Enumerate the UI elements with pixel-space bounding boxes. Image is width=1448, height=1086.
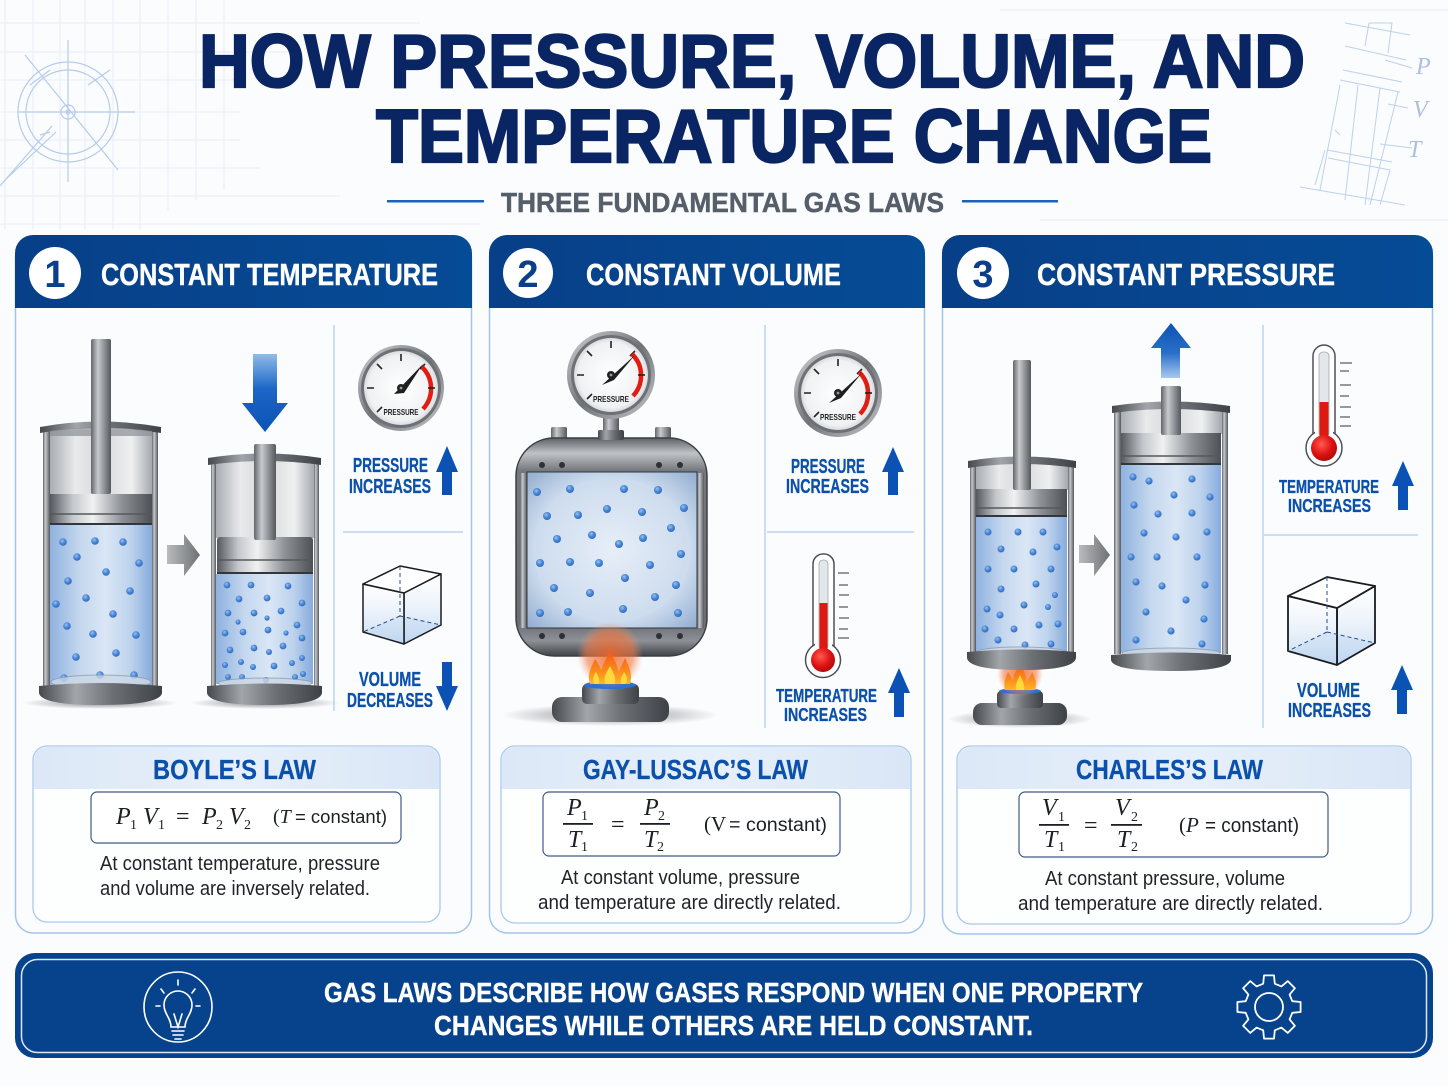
formula: Charles: = constant) — [1205, 815, 1299, 837]
panel 2 header: CONSTANT VOLUME — [586, 258, 841, 292]
flame — [577, 622, 643, 688]
arrow: compression — [242, 354, 288, 432]
gauge: pressure — [358, 345, 444, 431]
title — [199, 19, 1305, 178]
formula: Charles: 1 — [1058, 810, 1065, 825]
piston cylinder after heating — [1111, 386, 1231, 671]
piston cylinder before compression — [22, 339, 178, 709]
gauge: pressure: PRESSURE — [820, 412, 856, 422]
panel 2 header: 2 — [517, 254, 539, 296]
footer text: CHANGES WHILE OTHERS ARE HELD CONSTANT. — [434, 1010, 1033, 1041]
label: volume increases: INCREASES — [1288, 700, 1371, 722]
formula: Boyle — [91, 792, 401, 843]
label: volume decreases: VOLUME — [359, 669, 421, 691]
label: pressure increases — [786, 456, 869, 498]
flame — [997, 651, 1043, 697]
description: Gay-Lussac: and temperature are directly related. — [538, 892, 841, 914]
arrow: temperature up — [1392, 461, 1414, 510]
formula: Gay-Lussac: T — [644, 827, 659, 853]
law card: Boyle's law — [33, 746, 440, 922]
title: TEMPERATURE CHANGE — [376, 94, 1212, 178]
gauge: pressure: PRESSURE — [384, 407, 419, 417]
formula: Charles — [1019, 792, 1328, 857]
formula: Boyle: = constant) — [295, 806, 387, 827]
formula: Charles: T — [1117, 827, 1132, 853]
footer banner — [15, 953, 1433, 1058]
formula: Boyle: (T — [273, 806, 293, 828]
panel 1 header: 1 — [44, 254, 66, 296]
label: volume decreases: DECREASES — [347, 690, 433, 712]
formula: Charles: 1 — [1058, 840, 1065, 855]
formula: Gay-Lussac: 2 — [657, 840, 664, 855]
label: pressure increases: INCREASES — [349, 476, 431, 498]
law card: Boyle's law: BOYLE’S LAW — [153, 754, 316, 785]
background: blueprint circle drawing — [0, 40, 135, 186]
panel 3 header: 3 — [972, 254, 994, 296]
label: temperature increases — [1279, 476, 1379, 516]
label: temperature increases: INCREASES — [1288, 495, 1371, 516]
background: blueprint grid — [0, 0, 1448, 230]
footer text: GAS LAWS DESCRIBE HOW GASES RESPOND WHEN ONE PROPERTY — [324, 977, 1143, 1008]
arrow: process — [1079, 534, 1110, 576]
law card: Gay-Lussac's law — [501, 746, 911, 923]
arrow: expansion — [1151, 323, 1191, 378]
label: pressure increases: PRESSURE — [353, 455, 428, 477]
law card: Gay-Lussac's law: GAY-LUSSAC’S LAW — [583, 754, 808, 785]
description: Charles: and temperature are directly related. — [1018, 893, 1323, 915]
formula: Gay-Lussac: 1 — [581, 809, 588, 824]
icon: light bulb — [144, 972, 212, 1042]
formula: Boyle: 2 — [244, 818, 251, 833]
icon: thermometer — [806, 554, 849, 678]
background: blueprint piston drawing with P V T — [1300, 23, 1431, 205]
formula: Gay-Lussac: 1 — [581, 840, 588, 855]
formula: Gay-Lussac — [543, 792, 840, 856]
formula: Gay-Lussac: T — [568, 827, 583, 853]
icon: gear — [1237, 975, 1301, 1039]
formula: Charles: 2 — [1131, 810, 1138, 825]
background: blueprint piston drawing with P V T: V — [1413, 97, 1430, 123]
description: Boyle: At constant temperature, pressure — [100, 853, 380, 875]
label: pressure increases — [349, 455, 431, 498]
arrow: process — [167, 534, 200, 576]
arrow: volume down — [436, 662, 458, 711]
label: temperature increases: TEMPERATURE — [1279, 476, 1379, 497]
formula: Charles: V — [1115, 795, 1132, 821]
burner — [502, 681, 718, 726]
piston cylinder after compression — [190, 444, 340, 709]
formula: Boyle: P — [201, 804, 217, 830]
arrow: pressure up — [882, 447, 904, 495]
background: blueprint piston drawing with P V T: T — [1408, 137, 1423, 163]
formula: Charles: T — [1044, 827, 1059, 853]
label: temperature increases: INCREASES — [784, 704, 867, 725]
piston cylinder before heating — [967, 360, 1076, 670]
sealed tank — [516, 418, 707, 656]
label: pressure increases: INCREASES — [786, 476, 869, 498]
formula: Gay-Lussac: = constant) — [729, 815, 827, 836]
formula: Gay-Lussac: (V — [704, 812, 726, 836]
formula: Boyle: P — [115, 804, 131, 830]
label: volume decreases — [347, 669, 433, 712]
formula: Gay-Lussac: = — [611, 812, 625, 838]
background: blueprint piston drawing with P V T: P — [1415, 54, 1431, 80]
icon: shrinking volume cube — [363, 566, 441, 644]
formula: Gay-Lussac: 2 — [658, 809, 665, 824]
formula: Charles: 2 — [1131, 840, 1138, 855]
panel 3 header — [942, 235, 1433, 308]
description: Gay-Lussac: At constant volume, pressure — [561, 867, 800, 889]
arrow: temperature up — [888, 668, 910, 717]
label: volume increases — [1288, 680, 1371, 722]
gauge: tank pressure: PRESSURE — [593, 394, 629, 404]
formula: Charles: = — [1084, 813, 1098, 839]
formula: Charles: (P — [1179, 813, 1199, 837]
formula: Boyle: 2 — [216, 818, 223, 833]
label: pressure increases: PRESSURE — [791, 456, 865, 478]
label: temperature increases: TEMPERATURE — [776, 685, 877, 706]
burner — [948, 688, 1092, 728]
formula: Boyle: V — [143, 804, 160, 830]
icon: thermometer — [1306, 345, 1352, 466]
title: HOW PRESSURE, VOLUME, AND — [199, 19, 1305, 103]
gauge: tank pressure — [567, 331, 655, 419]
subtitle: THREE FUNDAMENTAL GAS LAWS — [501, 187, 944, 218]
panel 2 header — [489, 235, 925, 308]
description: Boyle: and volume are inversely related. — [100, 878, 370, 900]
formula: Boyle: = — [176, 804, 190, 830]
description: Charles — [1018, 868, 1323, 915]
formula: Charles: V — [1042, 795, 1059, 821]
description: Gay-Lussac — [538, 867, 841, 914]
footer text — [324, 977, 1143, 1041]
label: temperature increases — [776, 685, 877, 725]
icon: growing volume cube — [1288, 577, 1375, 665]
panel 3 header: CONSTANT PRESSURE — [1037, 258, 1335, 292]
panel: constant volume — [489, 235, 925, 933]
formula: Gay-Lussac: P — [566, 795, 582, 821]
formula: Boyle: 1 — [130, 818, 137, 833]
formula: Boyle: 1 — [158, 818, 165, 833]
law card: Charles's law — [957, 746, 1411, 924]
description: Boyle — [100, 853, 380, 900]
law card: Charles's law: CHARLES’S LAW — [1076, 754, 1263, 785]
formula: Gay-Lussac: P — [643, 795, 659, 821]
panel 1 header: CONSTANT TEMPERATURE — [101, 258, 438, 292]
arrow: volume up — [1391, 665, 1413, 714]
panel: constant temperature — [15, 235, 472, 933]
arrow: pressure up — [436, 446, 458, 495]
panel 1 header — [15, 235, 472, 308]
panel: constant pressure — [942, 235, 1433, 934]
gauge: pressure — [794, 349, 882, 437]
formula: Boyle: V — [229, 804, 246, 830]
label: volume increases: VOLUME — [1297, 680, 1360, 702]
description: Charles: At constant pressure, volume — [1045, 868, 1285, 890]
